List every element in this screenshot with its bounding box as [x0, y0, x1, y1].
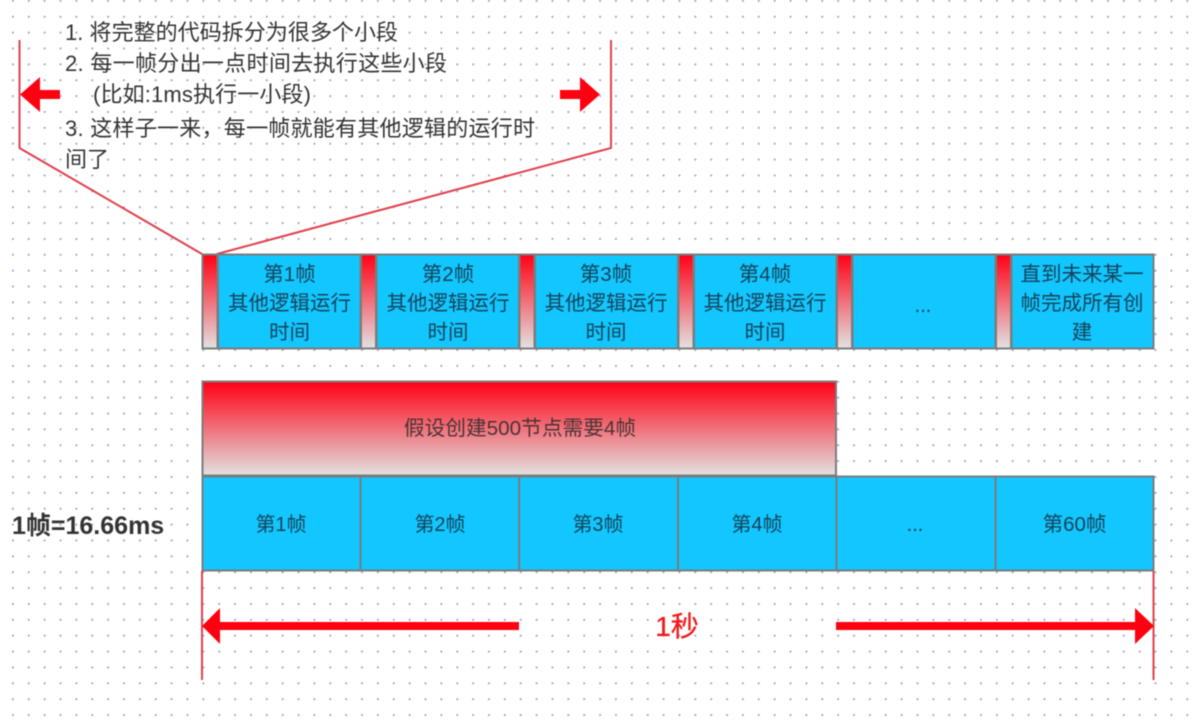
frame ellipsis: ...: [915, 295, 931, 317]
final frame: 直到未来某一: [1020, 263, 1144, 286]
arrow: one second left: [202, 608, 519, 644]
top row: sliced frames: [202, 254, 1154, 348]
frame 3 with other logic time: 其他逻辑运行: [544, 292, 668, 315]
frame 2 with other logic time: 其他逻辑运行: [386, 292, 510, 315]
frame 4: 第4帧: [731, 513, 783, 536]
one second label: 1秒: [655, 611, 699, 642]
frame 2: 第2帧: [414, 513, 466, 536]
frame 3: [519, 476, 678, 570]
frame 3 with other logic time: [535, 254, 678, 348]
frame 2 with other logic time: 时间: [428, 321, 468, 344]
final frame: [1012, 254, 1154, 348]
frame 60: 第60帧: [1043, 513, 1106, 536]
frame ellipsis: ...: [907, 514, 923, 536]
frame ellipsis: [852, 254, 996, 348]
frame 2: [360, 476, 519, 570]
instruction text block: [65, 20, 535, 172]
frame ellipsis: [836, 476, 996, 570]
frame 1 with other logic time: 时间: [269, 321, 310, 344]
frame 4: [678, 476, 836, 570]
frame duration label: 1帧=16.66ms: [12, 512, 164, 540]
zoom funnel lines: [20, 40, 611, 254]
frame 4 with other logic time: 第4帧: [739, 263, 791, 286]
slice 1: [202, 254, 218, 348]
final frame: 建: [1072, 321, 1092, 344]
frame 1 with other logic time: 第1帧: [263, 263, 316, 286]
slice 3: [520, 254, 534, 348]
slice 5: [837, 254, 852, 348]
arrow: expand left: [20, 77, 60, 112]
frame 3 with other logic time: 第3帧: [580, 263, 632, 286]
arrow: one second right: [836, 608, 1154, 644]
frame 1 with other logic time: 其他逻辑运行: [228, 292, 351, 315]
slice 6: [996, 254, 1011, 348]
final frame: 帧完成所有创: [1020, 292, 1144, 315]
frame 2 with other logic time: 第2帧: [422, 263, 474, 286]
bottom row: 60 frames: [202, 476, 1154, 570]
frame 3: 第3帧: [572, 513, 624, 536]
arrow: expand right: [560, 77, 600, 112]
long task bar: [202, 382, 836, 476]
frame 1: [202, 476, 360, 570]
frame 2 with other logic time: [376, 254, 519, 348]
instruction text block: 3. 这样子一来，每一帧就能有其他逻辑的运行时: [65, 116, 535, 141]
instruction text block: (比如:1ms执行一小段): [93, 82, 311, 107]
frame 4 with other logic time: 其他逻辑运行: [704, 292, 826, 315]
one second span boundary lines: [202, 571, 1154, 680]
slice 2: [361, 254, 376, 348]
frame 4 with other logic time: 时间: [744, 321, 786, 344]
long task bar: 假设创建500节点需要4帧: [404, 417, 636, 440]
instruction text block: 2. 每一帧分出一点时间去执行这些小段: [65, 51, 447, 76]
frame 1: 第1帧: [255, 513, 307, 536]
slice 4: [678, 254, 694, 348]
frame 4 with other logic time: [694, 254, 836, 348]
frame 1 with other logic time: [218, 254, 360, 348]
frame 60: [996, 476, 1154, 570]
instruction text block: 间了: [65, 147, 109, 172]
frame 3 with other logic time: 时间: [586, 321, 626, 344]
instruction text block: 1. 将完整的代码拆分为很多个小段: [65, 20, 398, 45]
